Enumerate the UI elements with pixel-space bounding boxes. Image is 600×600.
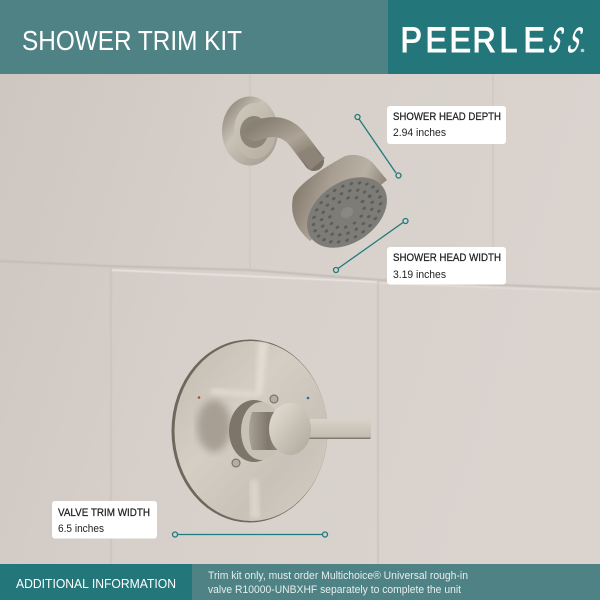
footer: note text: [192, 564, 600, 600]
screws: [232, 395, 278, 467]
dimension line: shower head depth: [355, 114, 401, 178]
callout: shower head width: SHOWER HEAD WIDTH: [393, 252, 501, 264]
brand logo: PEERLE: [400, 22, 545, 60]
footer: note text: Trim kit only, must order Multichoice® Universal rough-in: [208, 570, 468, 582]
title: SHOWER TRIM KIT: [22, 25, 242, 56]
callout: valve trim width: 6.5 inches: [58, 523, 104, 535]
temperature dots: [198, 396, 309, 399]
callout: shower head width: 3.19 inches: [393, 269, 446, 281]
footer: additional information label: ADDITIONAL INFORMATION: [16, 576, 176, 591]
callout: shower head depth: 2.94 inches: [393, 127, 446, 139]
trim plate: [172, 340, 328, 522]
shower head face: [294, 163, 400, 262]
handle barrel: [229, 400, 288, 462]
dimension line: valve trim width: [172, 532, 328, 537]
header logo band: [388, 0, 600, 74]
dimension line: shower head width: [334, 218, 408, 272]
footer: note text: valve R10000-UNBXHF separately to complete the unit: [208, 584, 461, 596]
collar nut: [298, 146, 325, 170]
lever handle: [305, 419, 371, 439]
arm: [255, 127, 314, 161]
brand logo: SS: [544, 21, 588, 61]
callout: shower head width: [387, 247, 506, 284]
footer: additional information label: [0, 564, 192, 600]
header title band: [0, 0, 388, 74]
flange: [222, 96, 278, 166]
callout: shower head depth: [387, 106, 506, 144]
callout: valve trim width: VALVE TRIM WIDTH: [58, 507, 150, 519]
callout: shower head depth: SHOWER HEAD DEPTH: [393, 111, 501, 123]
shower head and arm: [222, 96, 400, 262]
callout: valve trim width: [52, 501, 157, 538]
valve trim: [172, 340, 371, 522]
handle knob: [269, 403, 311, 455]
shower head body: [292, 155, 387, 241]
